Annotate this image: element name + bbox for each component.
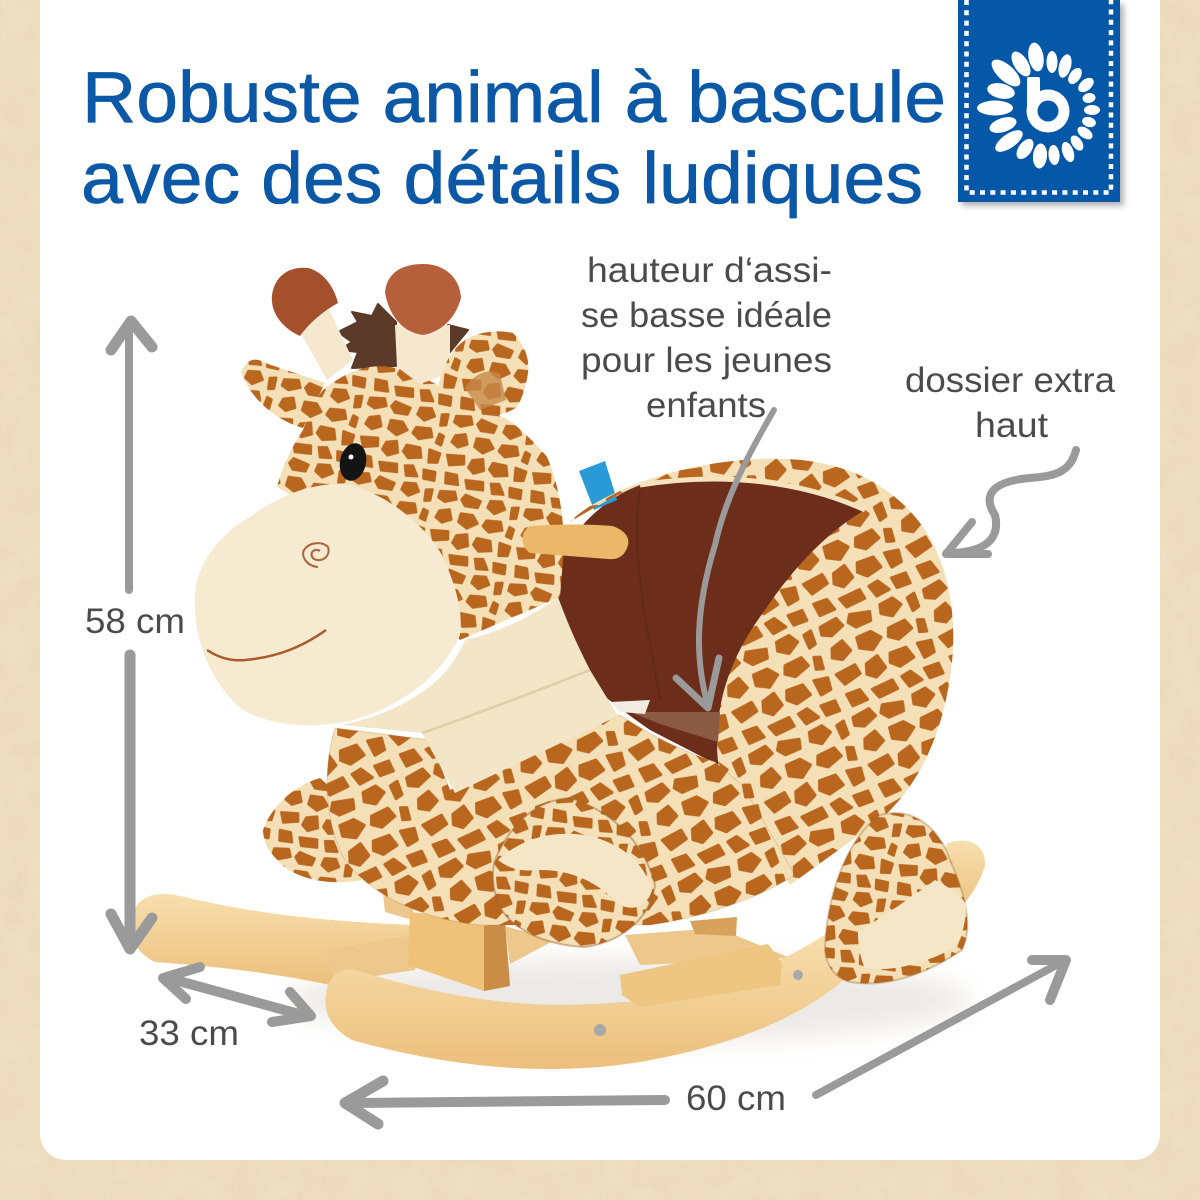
planks bbox=[327, 893, 790, 982]
rim highlight bbox=[640, 479, 865, 510]
icon: flower petals bbox=[977, 41, 1100, 169]
foot rest bbox=[620, 944, 782, 1007]
arrow: width left bbox=[345, 1081, 665, 1124]
safety strap bbox=[610, 700, 720, 742]
nose swirl bbox=[303, 543, 329, 567]
callout: seat height text bbox=[581, 251, 832, 425]
callout: seat height text: enfants bbox=[646, 386, 766, 425]
body bbox=[327, 715, 795, 925]
ear: right bbox=[437, 331, 528, 420]
head bbox=[277, 366, 564, 640]
muzzle bbox=[195, 484, 461, 725]
seat shell bbox=[570, 459, 953, 885]
rocker: back left bbox=[130, 894, 425, 985]
seat interior: seam bbox=[637, 490, 660, 700]
title: avec des détails ludiques bbox=[81, 139, 923, 219]
title: Robuste animal à bascule bbox=[82, 58, 946, 138]
logo: blue label with flower bbox=[958, 0, 1124, 206]
arrow: height bbox=[111, 321, 152, 949]
horn: right bbox=[385, 264, 461, 384]
arrow: backrest bbox=[946, 450, 1076, 554]
seat interior bbox=[556, 477, 865, 765]
arrow: depth bbox=[163, 967, 311, 1022]
rocker: front bbox=[325, 930, 862, 1069]
arrow: width right bbox=[816, 960, 1066, 1095]
scarf bbox=[342, 597, 618, 793]
icon: letter b bbox=[1026, 77, 1070, 132]
tag bbox=[579, 461, 617, 510]
callout: backrest text: haut bbox=[975, 406, 1048, 445]
title bbox=[81, 58, 946, 219]
label: 60 cm: 60 cm bbox=[686, 1079, 786, 1118]
floor shadow bbox=[290, 958, 970, 1042]
arrow: seat height bbox=[676, 410, 774, 708]
leg: front with pad bbox=[493, 798, 655, 947]
ear: left bbox=[241, 360, 325, 428]
callout: backrest text: dossier extra bbox=[905, 361, 1116, 400]
leg: rear left bbox=[263, 778, 362, 882]
wooden seat block bbox=[408, 912, 510, 991]
product: rocking giraffe bbox=[130, 264, 985, 1069]
callout: seat height text: se basse idéale bbox=[581, 296, 832, 335]
eye bbox=[336, 441, 370, 483]
callout: backrest text bbox=[905, 361, 1116, 445]
horn: left bbox=[272, 268, 353, 380]
rocker: back right bbox=[925, 841, 985, 918]
mouth bbox=[207, 630, 326, 660]
callout: seat height text: pour les jeunes bbox=[581, 341, 832, 380]
label: 58 cm: 58 cm bbox=[85, 602, 185, 641]
leg: right with pad bbox=[825, 813, 967, 983]
mane bbox=[338, 304, 468, 368]
callout: seat height text: hauteur d‘assi- bbox=[587, 251, 832, 290]
handle bbox=[522, 524, 628, 559]
bolts bbox=[594, 1024, 606, 1036]
label: 33 cm: 33 cm bbox=[139, 1014, 239, 1053]
